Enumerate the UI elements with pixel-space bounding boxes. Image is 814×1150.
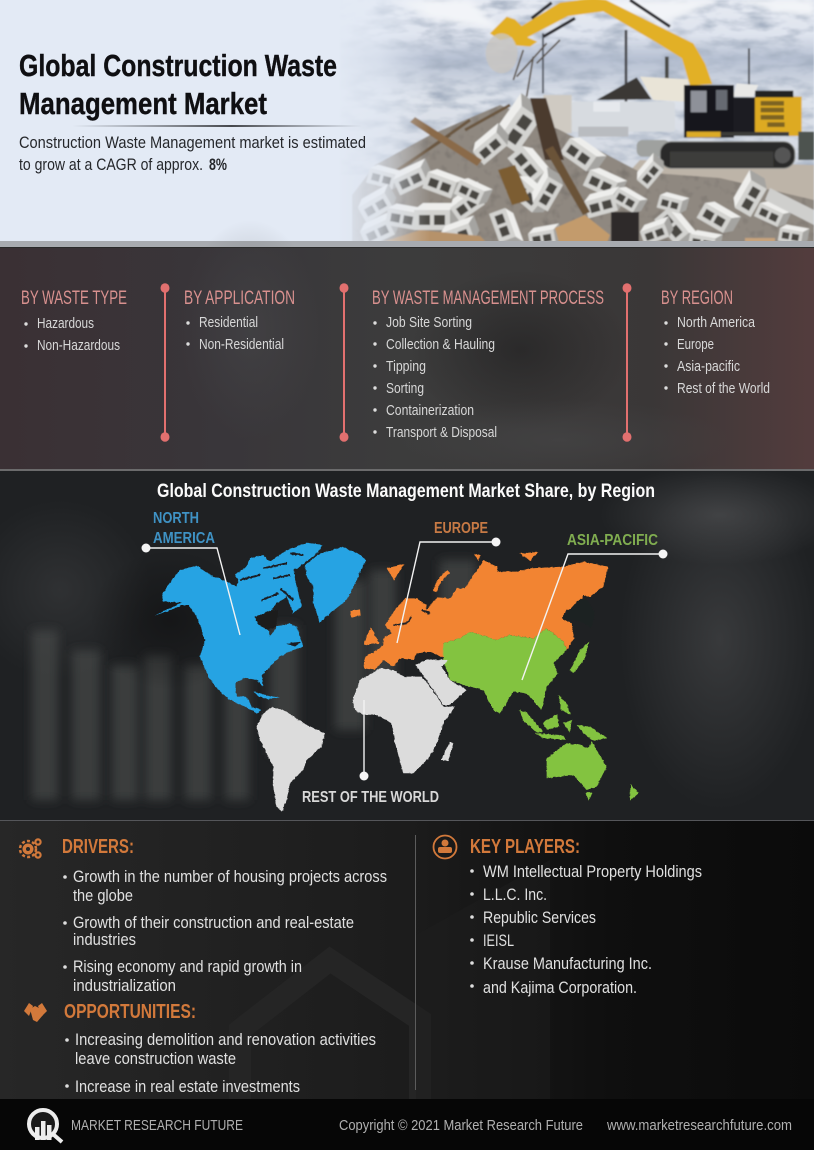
segment: by application: BY APPLICATION (184, 288, 295, 309)
segment: by application: Residential (199, 314, 258, 331)
rubble pile (352, 93, 814, 241)
segment: by waste management process: Collection & Hauling (386, 336, 495, 353)
drivers list: industries (73, 930, 136, 949)
key players list: and Kajima Corporation. (483, 978, 637, 997)
callout: Asia-Pacific: ASIA-PACIFIC (567, 532, 658, 549)
key players heading and icon: KEY PLAYERS: (470, 836, 580, 858)
panel: drivers, opportunities and key players (0, 821, 814, 1099)
key players list (470, 862, 702, 997)
icon: Market Research Future logo (29, 1110, 62, 1142)
key players list: L.L.C. Inc. (483, 885, 547, 904)
world map (154, 543, 639, 812)
segment: by region: Rest of the World (677, 380, 770, 397)
segment: by waste management process: Sorting (386, 380, 424, 397)
segment: by application: Non-Residential (199, 336, 284, 353)
divider 1 (160, 283, 170, 442)
panel: regional market share map (0, 465, 814, 821)
copyright: Copyright © 2021 Market Research Future (339, 1117, 583, 1134)
drivers list: the globe (73, 886, 133, 905)
panel: market segmentation (0, 220, 814, 480)
website: www.marketresearchfuture.com (606, 1117, 792, 1134)
opportunities list (65, 1030, 376, 1096)
icon: handshake (24, 1003, 47, 1022)
region: North America (154, 543, 366, 713)
callout: North America: NORTH (153, 510, 199, 527)
segment: by waste management process: Containerization (386, 402, 474, 419)
segment: by region: Asia-pacific (677, 358, 740, 375)
segment: by waste type (21, 288, 127, 354)
opportunities heading and handshake icon: OPPORTUNITIES: (64, 1001, 196, 1023)
footer (0, 1099, 814, 1150)
segment: by application (184, 288, 295, 353)
callout: North America (142, 510, 240, 635)
segment: by waste management process: BY WASTE MANAGEMENT PROCESS (372, 288, 604, 309)
divider 2 (340, 283, 348, 442)
hero subtitle with CAGR: to grow at a CAGR of approx. (19, 155, 203, 174)
key players list: IEISL (483, 931, 514, 950)
brand name: MARKET RESEARCH FUTURE (71, 1117, 243, 1134)
hero subtitle with CAGR: 8% (209, 155, 227, 174)
icon: key players badge (434, 836, 456, 858)
segment: by region: BY REGION (661, 288, 733, 309)
key players heading and icon (434, 836, 580, 858)
segment: by region (661, 288, 770, 397)
segment: by waste type: Non-Hazardous (37, 337, 120, 354)
hero photo: excavator on rubble (340, 0, 814, 254)
segment: by waste type: BY WASTE TYPE (21, 288, 127, 309)
segment: by waste management process: Tipping (386, 358, 426, 375)
drivers list (63, 867, 387, 995)
key players list: Republic Services (483, 908, 596, 927)
callout: North America: AMERICA (153, 530, 215, 547)
icon: gears (20, 839, 41, 858)
callout: Europe (397, 520, 500, 643)
segment: by region: Europe (677, 336, 714, 353)
drivers heading and gear icon (20, 836, 134, 858)
callout: Europe: EUROPE (434, 520, 488, 537)
callout: Asia-Pacific (522, 532, 668, 680)
segment: by waste management process (372, 288, 604, 441)
opportunities heading and handshake icon (24, 1001, 196, 1023)
segment: by waste management process: Job Site Sorting (386, 314, 472, 331)
key players list: WM Intellectual Property Holdings (483, 862, 702, 881)
hero subtitle with CAGR: Construction Waste Management market is estimated (19, 133, 366, 152)
opportunities list: Increasing demolition and renovation activities (75, 1030, 376, 1049)
segment: by waste type: Hazardous (37, 315, 94, 332)
hero title: Global Construction Waste (19, 48, 337, 83)
drivers heading and gear icon: DRIVERS: (62, 836, 134, 858)
hero title (19, 48, 337, 121)
opportunities list: leave construction waste (75, 1049, 236, 1068)
panel: hero header (0, 0, 814, 254)
hero title: Management Market (19, 86, 267, 121)
drivers list: Growth in the number of housing projects across (73, 867, 387, 886)
drivers list: Rising economy and rapid growth in (73, 957, 302, 976)
segment: by waste management process: Transport & Disposal (386, 424, 497, 441)
region: Eurasia (Europe) (350, 552, 608, 670)
region: Asia-Pacific (443, 628, 639, 801)
drivers list: industrialization (73, 976, 176, 995)
callout: Rest of the World (302, 700, 439, 806)
region: rest of the world (257, 659, 467, 812)
hero subtitle with CAGR (19, 133, 366, 174)
segment: by region: North America (677, 314, 756, 331)
opportunities list: Increase in real estate investments (75, 1077, 300, 1096)
callout: Rest of the World: REST OF THE WORLD (302, 789, 439, 806)
drivers list: Growth of their construction and real-estate (73, 913, 354, 932)
ground (560, 160, 814, 246)
divider 3 (622, 283, 632, 442)
key players list: Krause Manufacturing Inc. (483, 954, 652, 973)
map title: Global Construction Waste Management Market Share, by Region (157, 481, 655, 502)
excavator and truck (486, 0, 814, 168)
